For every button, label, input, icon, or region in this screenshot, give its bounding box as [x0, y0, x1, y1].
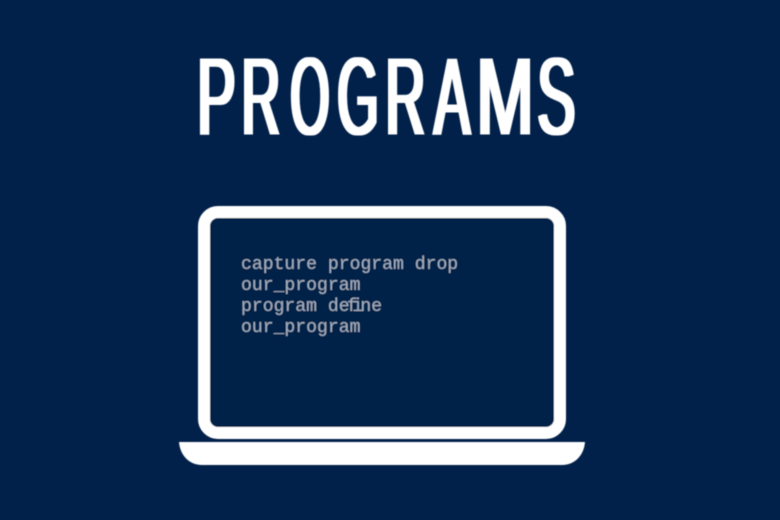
title: R	[386, 36, 425, 158]
code text: program define	[241, 297, 382, 317]
code text: our_program	[241, 318, 360, 338]
title: A	[434, 36, 470, 158]
laptop screen	[204, 212, 560, 433]
icon: laptop	[179, 212, 585, 465]
title: P	[197, 36, 236, 158]
title: R	[242, 36, 280, 158]
code text: capture program drop	[241, 255, 458, 275]
title: M	[476, 36, 534, 158]
title: S	[537, 36, 575, 158]
code text: our_program	[241, 276, 360, 296]
title: O	[290, 36, 329, 158]
laptop base	[179, 442, 585, 465]
title: G	[337, 36, 379, 158]
